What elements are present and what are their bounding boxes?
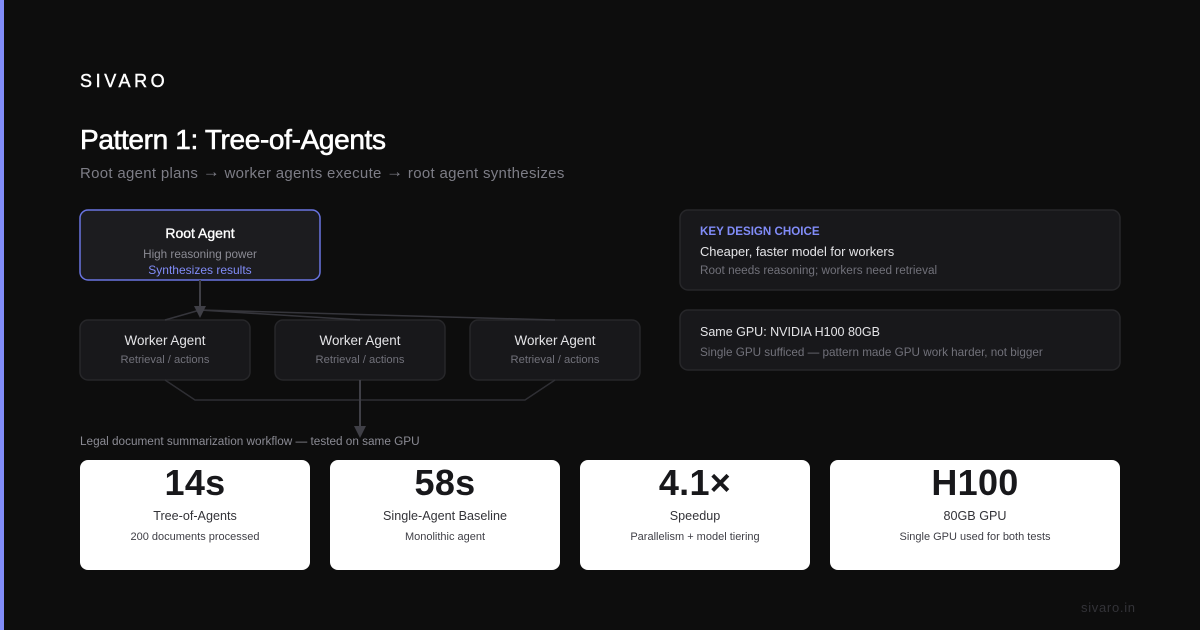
worker 3 detail: Retrieval / actions <box>511 354 599 366</box>
worker 1 name: Worker Agent <box>125 333 205 348</box>
stat note: 200 documents processed <box>130 531 260 543</box>
stat label: Tree-of-Agents <box>153 509 237 523</box>
node: worker agent 1 <box>121 333 210 366</box>
stat label: Single-Agent Baseline <box>383 509 507 523</box>
node: root agent <box>143 225 257 277</box>
stat card: H100 <box>830 460 1120 570</box>
stat label: Speedup <box>670 509 720 523</box>
worker 3 name: Worker Agent <box>515 333 595 348</box>
worker 2 detail: Retrieval / actions <box>316 354 404 366</box>
root agent name: Root Agent <box>165 225 235 241</box>
stat value: H100 <box>931 462 1019 503</box>
node: worker agent 3 <box>511 333 600 366</box>
stat card: tree-of-agents <box>80 460 310 570</box>
stat value: 4.1× <box>659 462 731 503</box>
stat label: 80GB GPU <box>944 509 1006 523</box>
logo: SIVARO: SIVARO <box>80 71 168 91</box>
panel main text: Cheaper, faster model for workers <box>700 244 894 259</box>
node: worker agent 2 <box>316 333 404 366</box>
panel secondary text: Root needs reasoning; workers need retrieval <box>700 264 937 277</box>
accent bar <box>0 0 4 630</box>
subtitle: Root agent plans → worker agents execute → root agent synthesizes <box>80 162 565 182</box>
panel heading: KEY DESIGN CHOICE <box>700 225 820 238</box>
panel secondary text: Single GPU sufficed — pattern made GPU work harder, not bigger <box>700 346 1043 359</box>
root agent accent detail: Synthesizes results <box>148 263 252 277</box>
stat note: Parallelism + model tiering <box>630 531 760 543</box>
panel: same GPU <box>700 325 1043 359</box>
stat card: single-agent baseline <box>330 460 560 570</box>
footer: site url: sivaro.in <box>1081 600 1136 615</box>
title: Pattern 1: Tree-of-Agents <box>80 124 386 155</box>
worker 1 detail: Retrieval / actions <box>121 354 209 366</box>
stats caption: Legal document summarization workflow — tested on same GPU <box>80 435 420 448</box>
stat value: 58s <box>415 462 475 503</box>
stat note: Monolithic agent <box>405 531 485 543</box>
stat card: speedup <box>580 460 810 570</box>
worker 2 name: Worker Agent <box>320 333 400 348</box>
panel main text: Same GPU: NVIDIA H100 80GB <box>700 325 880 339</box>
root agent detail: High reasoning power <box>143 248 257 261</box>
panel: key design choice <box>700 225 937 277</box>
stat note: Single GPU used for both tests <box>899 531 1051 543</box>
stat value: 14s <box>165 462 225 503</box>
